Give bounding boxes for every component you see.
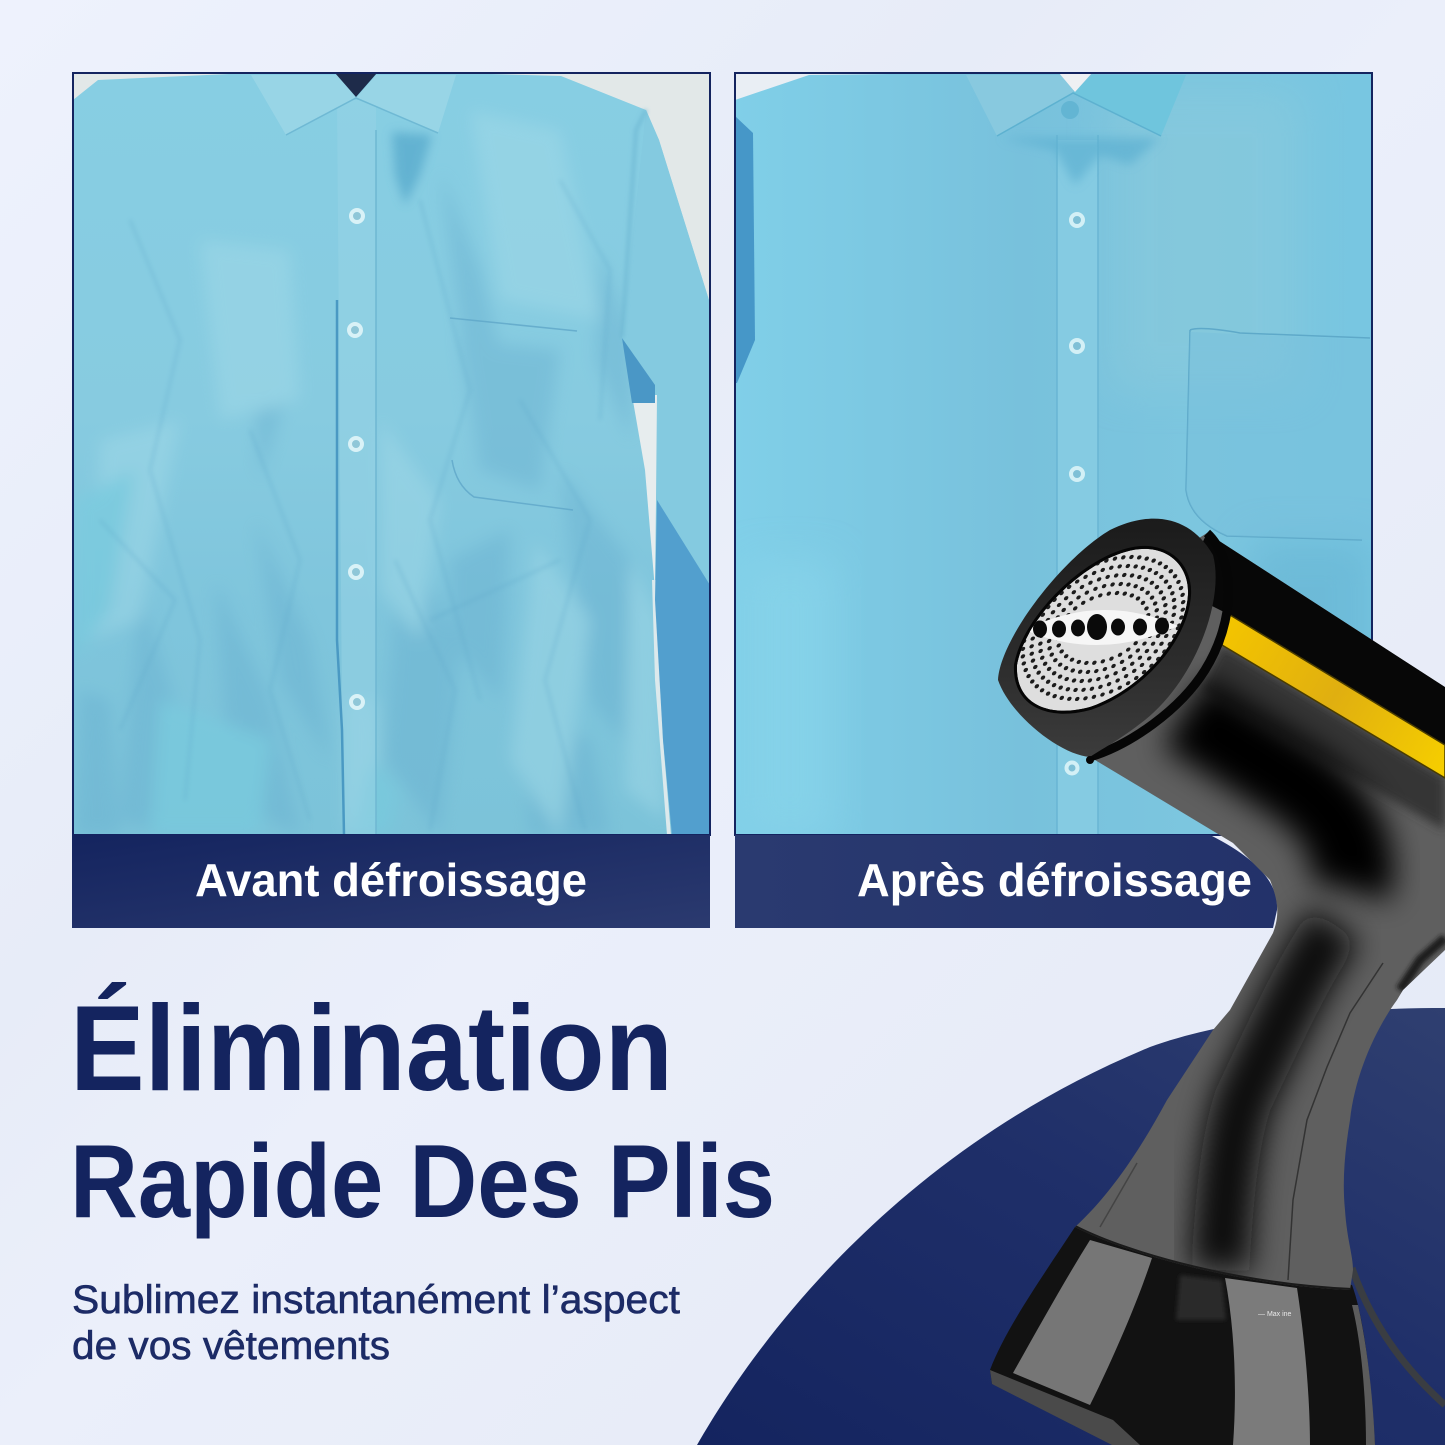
title: Rapide Des Plis	[70, 1124, 775, 1240]
panel: after photo	[735, 73, 1372, 928]
shirt buttons	[349, 210, 363, 708]
main vents	[1033, 614, 1169, 640]
wrinkle shading	[75, 110, 665, 835]
subtitle: de vos vêtements	[72, 1324, 390, 1368]
shirt pocket	[450, 318, 577, 510]
subtitle: Sublimez instantanément l’aspect	[72, 1278, 680, 1322]
right sleeve	[622, 110, 713, 835]
steamer head	[998, 519, 1229, 764]
navy dome	[697, 1008, 1445, 1445]
shirt placket	[337, 100, 376, 835]
caption: before: Avant défroissage	[195, 854, 587, 906]
shirt collar	[251, 75, 456, 135]
caption: after: Après défroissage	[857, 854, 1252, 906]
title: Élimination	[70, 980, 673, 1116]
shirt placket	[1057, 135, 1098, 835]
shirt: wrinkled	[73, 73, 713, 835]
tank marking: — Max ine	[1258, 1311, 1292, 1318]
shirt left sleeve shadow	[735, 116, 755, 383]
shirt collar	[966, 75, 1075, 136]
title	[70, 980, 775, 1240]
caption: after	[735, 835, 1277, 928]
steamer cable	[1352, 1268, 1445, 1405]
shadow under collar	[392, 132, 432, 205]
panel: before photo	[72, 73, 713, 928]
perforated plate	[1017, 548, 1188, 711]
fine crease lines	[100, 180, 610, 830]
shirt buttons	[1066, 214, 1083, 774]
shirt: smooth	[735, 73, 1372, 840]
steamer body	[1050, 520, 1445, 1300]
subtitle	[72, 1278, 680, 1368]
steamer base tank	[990, 1227, 1375, 1445]
caption: before	[72, 835, 710, 928]
head indicator dot	[1086, 756, 1094, 764]
yellow stripe	[1222, 615, 1445, 778]
product: garment steamer	[990, 519, 1445, 1445]
shirt pocket	[1186, 329, 1370, 540]
